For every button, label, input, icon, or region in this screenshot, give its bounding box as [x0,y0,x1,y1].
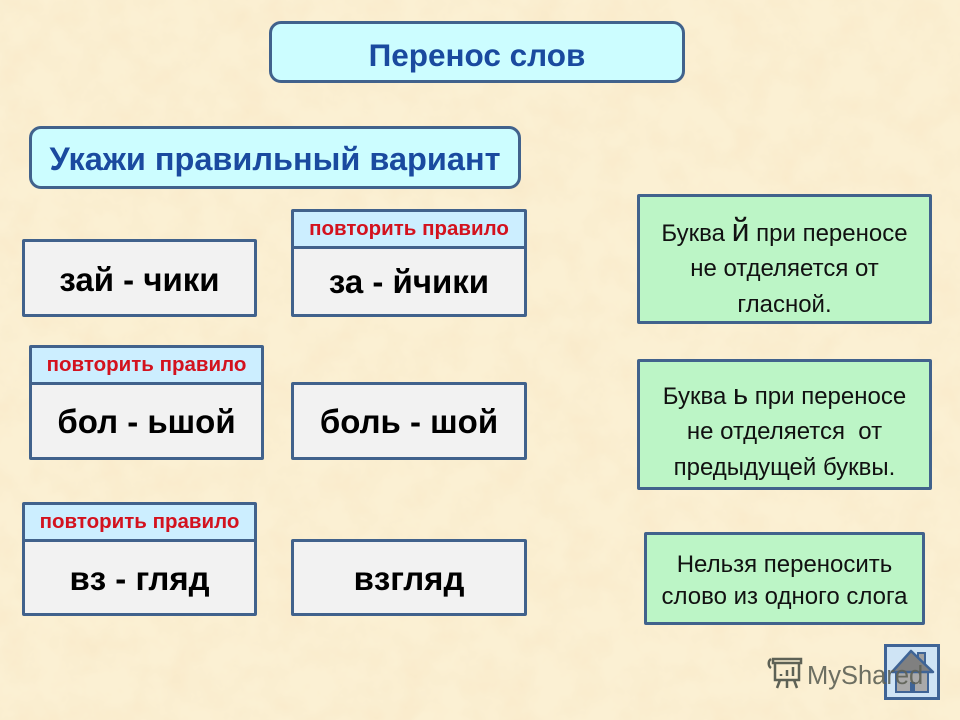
option: за - йчики: за - йчики [329,263,489,300]
rule: one syllable: Нельзя переносить [677,551,892,578]
option: вз - гляд: вз - гляд [69,560,210,597]
rule: letter Ь: не отделяется от [687,418,882,445]
rule: letter Ь: предыдущей буквы. [674,454,895,481]
subtitle: instruction: Укажи правильный вариант [50,141,500,177]
tab: повторить правило 2 [29,345,264,385]
watermark: MyShared: MyShared [807,662,923,690]
tab: повторить правило 2: повторить правило [47,353,246,376]
rule: letter Й [637,194,932,324]
option: взгляд [291,539,527,616]
title [269,21,685,83]
tab: повторить правило 3 [22,502,257,542]
subtitle: instruction [29,126,521,189]
rule: letter Й: не отделяется от [690,255,879,282]
option: за - йчики [291,246,527,317]
option: взгляд: взгляд [354,560,464,597]
option: вз - гляд [22,539,257,616]
rule: letter Й: гласной. [737,291,832,318]
option: бол - ьшой [29,382,264,460]
tab: повторить правило 1: повторить правило [309,217,509,240]
rule: letter Й: Буква й при переносе [661,212,908,248]
option: боль - шой [291,382,527,460]
icon: home button [884,644,940,700]
option: бол - ьшой: бол - ьшой [57,403,236,440]
watermark: MyShared [768,658,923,690]
option: зай - чики [22,239,257,317]
tab: повторить правило 1 [291,209,527,249]
rule: letter Ь [637,359,932,490]
rule: letter Ь: Буква ь при переносе [663,379,906,411]
title: Перенос слов [369,37,585,73]
option: боль - шой: боль - шой [320,403,498,440]
rule: one syllable [644,532,925,625]
rule: one syllable: слово из одного слога [661,583,908,610]
option: зай - чики: зай - чики [59,261,220,298]
tab: повторить правило 3: повторить правило [40,510,239,533]
